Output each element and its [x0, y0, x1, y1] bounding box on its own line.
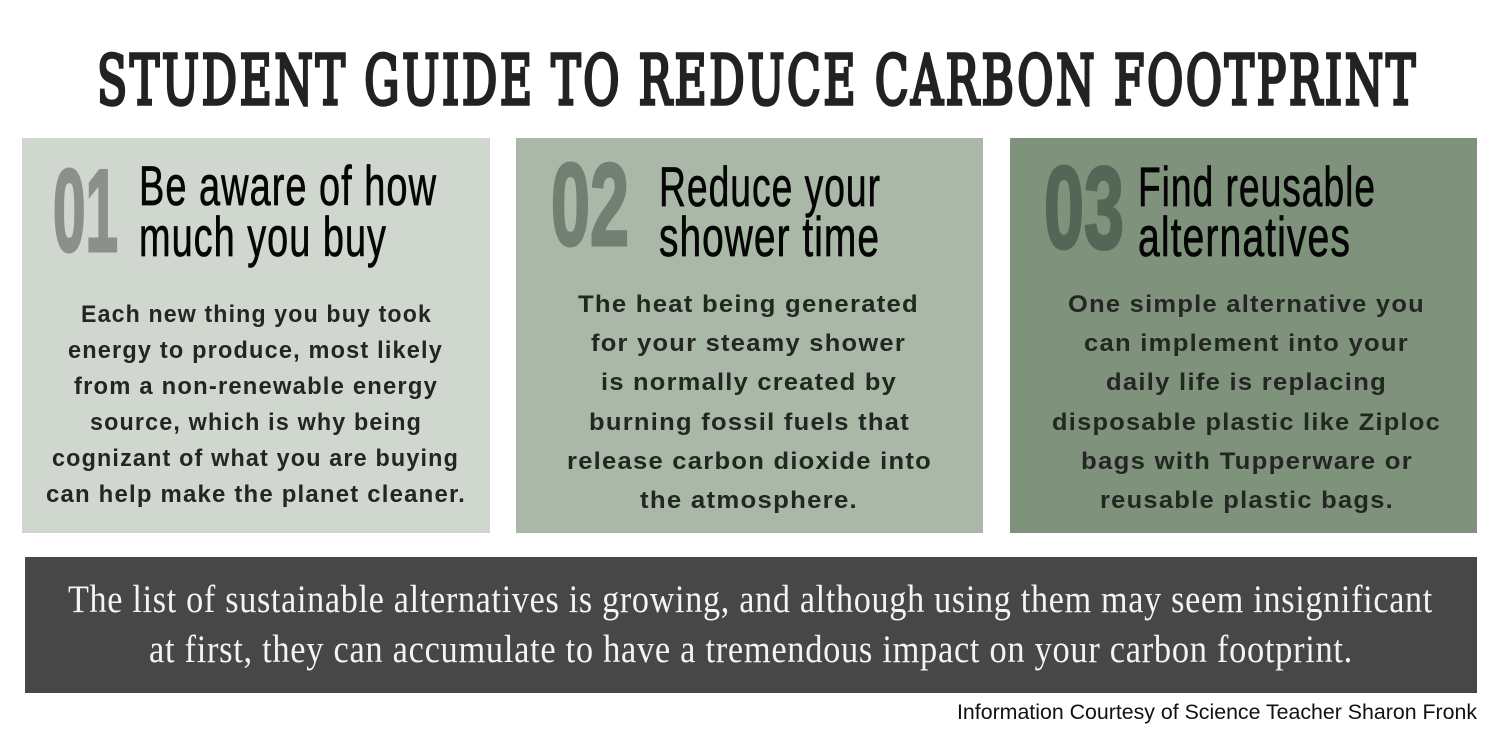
panel: step 03: [1010, 138, 1477, 533]
text block: step 03: One simple alternative you: [1068, 291, 1425, 318]
text block: step 02: burning fossil fuels that: [589, 409, 910, 436]
heading: step 03: [1138, 155, 1376, 268]
heading: step 02: Reduce your: [659, 155, 881, 218]
heading: step 01: Be aware of how: [139, 154, 437, 217]
panel: step 01: 01: [53, 145, 118, 276]
heading: step 01: much you buy: [139, 205, 387, 268]
text block: closing message: at first, they can accumulate to have a tremendous impact on your carbon footprint.: [149, 628, 1353, 671]
text block: step 02: [567, 291, 932, 514]
text block: step 01: from a non-renewable energy: [74, 373, 438, 400]
panel: closing message: [25, 557, 1477, 693]
text block: step 01: can help make the planet cleaner.: [46, 481, 466, 508]
text block: step 02: the atmosphere.: [640, 487, 858, 514]
heading: step 03: Find reusable: [1138, 155, 1376, 218]
text block: step 03: bags with Tupperware or: [1081, 448, 1413, 475]
text block: step 01: energy to produce, most likely: [68, 337, 443, 364]
panel: step 01: [22, 138, 490, 533]
text block: step 03: disposable plastic like Ziploc: [1052, 409, 1441, 436]
text block: closing message: [68, 578, 1433, 671]
text block: step 02: The heat being generated: [578, 291, 919, 318]
panel: step 02: [516, 138, 983, 533]
text block: step 02: for your steamy shower: [591, 330, 906, 357]
heading: step 03: alternatives: [1138, 205, 1351, 268]
text block: step 01: [46, 301, 466, 508]
text block: step 03: [1052, 291, 1441, 514]
text block: step 03: daily life is replacing: [1106, 369, 1387, 396]
step number 03: 03: [1044, 142, 1124, 273]
text block: step 01: source, which is why being: [90, 409, 422, 436]
text block: step 01: Each new thing you buy took: [81, 301, 432, 328]
heading: step 02: shower time: [659, 205, 880, 268]
text block: step 03: reusable plastic bags.: [1100, 487, 1394, 514]
text block: step 01: cognizant of what you are buying: [52, 445, 459, 472]
source credit: Information Courtesy of Science Teacher Sharon Fronk: [957, 701, 1477, 724]
text block: step 02: is normally created by: [601, 369, 897, 396]
heading: step 02: [659, 155, 881, 268]
text block: step 03: can implement into your: [1084, 330, 1409, 357]
heading: step 01: [139, 154, 437, 268]
text block: step 02: release carbon dioxide into: [567, 448, 932, 475]
step number 02: 02: [551, 139, 629, 270]
